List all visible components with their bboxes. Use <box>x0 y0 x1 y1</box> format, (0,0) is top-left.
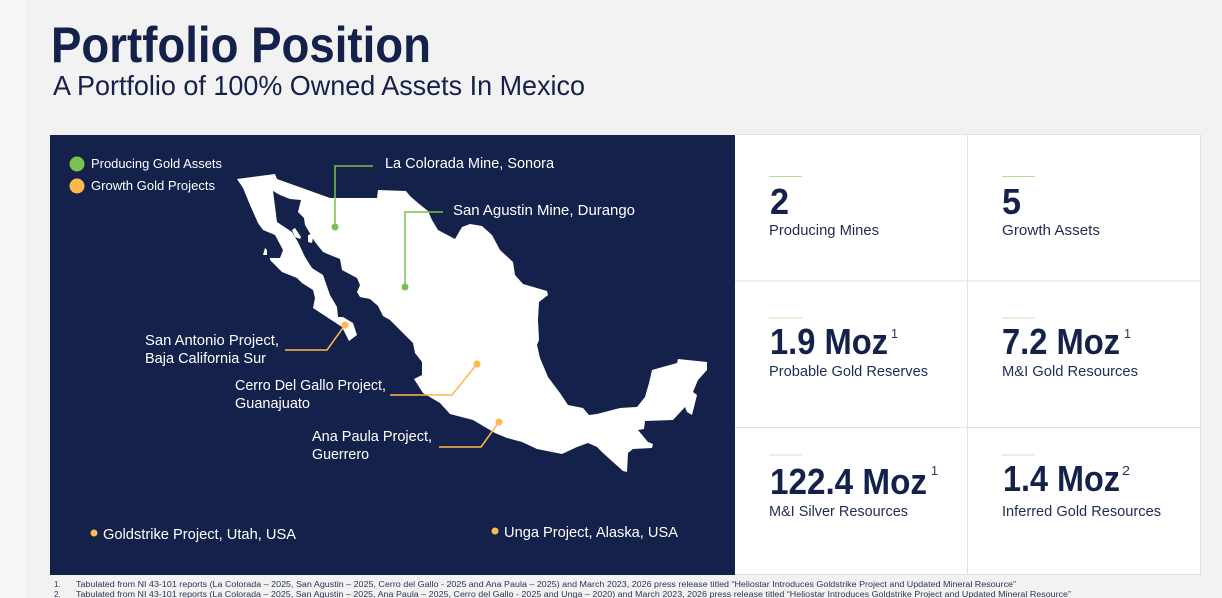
stat: probable gold reserves: 1.9 Moz <box>770 321 888 362</box>
stat: growth assets <box>1002 176 1100 239</box>
stat: producing mines: 2 <box>770 181 789 222</box>
stat: M&I gold resources: M&I Gold Resources <box>1002 363 1138 380</box>
stat: inferred gold resources <box>1002 454 1161 520</box>
title: Portfolio Position <box>51 17 431 73</box>
stat: producing mines <box>769 176 879 239</box>
footnotes <box>54 580 1071 598</box>
stat: M&I gold resources: 7.2 Moz <box>1002 321 1120 362</box>
footnotes: Tabulated from NI 43-101 reports (La Colorada – 2025, San Agustin – 2025, Cerro del Gallo - 2025 and Ana Paula – 2025) and March 2023, 2026 press release titled “Heliostar Introduces Goldstrike Project and Updated Mineral Resource” <box>76 580 1016 589</box>
callout: Cerro Del Gallo Project: Cerro Del Gallo Project, <box>235 377 386 394</box>
panel: map <box>50 135 735 575</box>
callout: Ana Paula Project <box>312 418 502 463</box>
panel: statistics <box>735 134 1201 575</box>
callout: Unga Project: Unga Project, Alaska, USA <box>504 524 678 541</box>
callout: Cerro Del Gallo Project <box>235 360 480 412</box>
stat: M&I silver resources: 122.4 Moz <box>770 461 927 502</box>
callout: San Agustin Mine <box>402 202 635 290</box>
legend <box>70 156 222 194</box>
callout: Goldstrike Project: Goldstrike Project, Utah, USA <box>103 526 296 543</box>
callout: San Antonio Project: San Antonio Project, <box>145 332 279 349</box>
callout: La Colorada Mine <box>332 155 555 230</box>
stat: inferred gold resources: 1.4 Moz <box>1003 458 1120 499</box>
stat: probable gold reserves: 1 <box>891 326 898 341</box>
stat: M&I silver resources: M&I Silver Resources <box>769 503 908 520</box>
stat: probable gold reserves: Probable Gold Reserves <box>769 363 928 380</box>
callout: La Colorada Mine: La Colorada Mine, Sonora <box>385 155 555 172</box>
callout: Ana Paula Project: Guerrero <box>312 446 369 463</box>
footnotes: 1. <box>54 580 61 589</box>
stat: M&I gold resources: 1 <box>1124 326 1131 341</box>
stat: growth assets: 5 <box>1002 181 1021 222</box>
stat: inferred gold resources: Inferred Gold Resources <box>1002 503 1161 520</box>
map of Mexico <box>237 174 707 472</box>
callout: Cerro Del Gallo Project: Guanajuato <box>235 395 310 412</box>
legend: Growth Gold Projects <box>91 178 215 193</box>
stat: M&I silver resources: 1 <box>931 463 938 478</box>
callout: Ana Paula Project: Ana Paula Project, <box>312 428 432 445</box>
callout: San Antonio Project: Baja California Sur <box>145 350 266 367</box>
stat: M&I silver resources <box>769 454 938 520</box>
stat: inferred gold resources: 2 <box>1122 463 1130 478</box>
callout: San Antonio Project <box>145 322 348 367</box>
stat: probable gold reserves <box>769 317 928 380</box>
stat: growth assets: Growth Assets <box>1002 222 1100 239</box>
stat: M&I gold resources <box>1002 317 1138 380</box>
legend: Producing Gold Assets <box>91 156 222 171</box>
stat: producing mines: Producing Mines <box>769 222 879 239</box>
subtitle: A Portfolio of 100% Owned Assets In Mexico <box>53 70 585 101</box>
callout: San Agustin Mine: San Agustin Mine, Durango <box>453 202 635 219</box>
